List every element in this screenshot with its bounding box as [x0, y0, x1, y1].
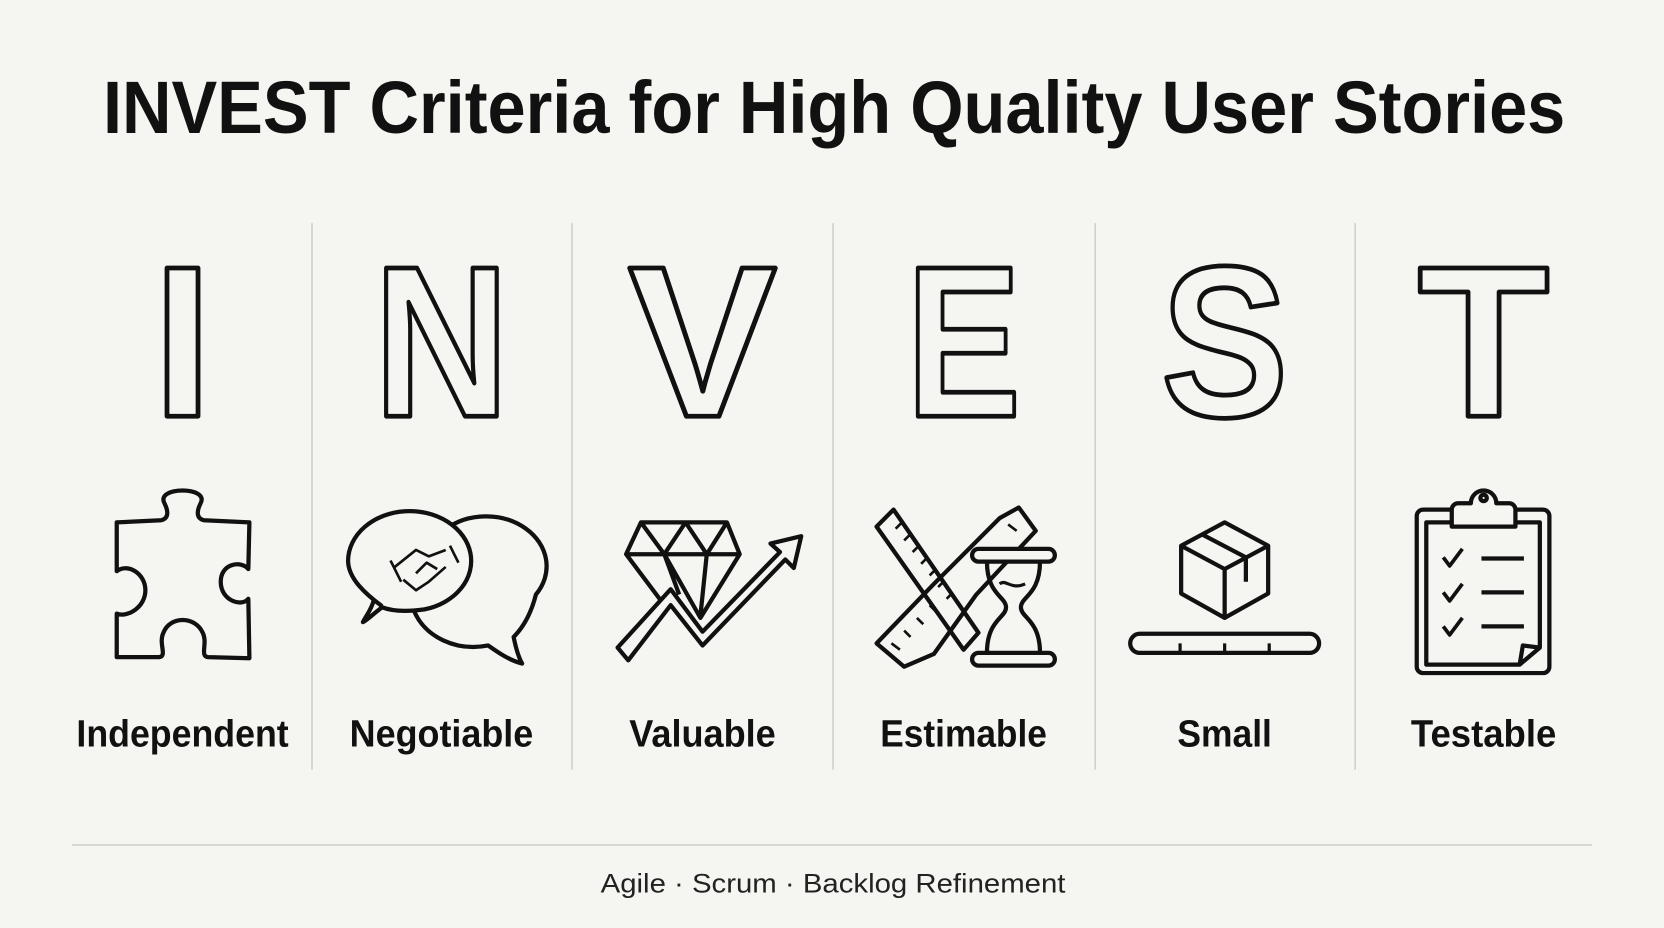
icon: rulers and hourglass	[877, 508, 1055, 667]
icon: clipboard checklist	[1417, 491, 1549, 673]
label: Valuable: Valuable	[629, 712, 776, 755]
handshake	[391, 546, 458, 590]
footer text: Agile · Scrum · Backlog Refinement	[601, 869, 1066, 899]
icon: puzzle piece	[117, 491, 249, 658]
letter V: V	[628, 221, 777, 462]
outlined letters INVEST	[153, 221, 1549, 462]
letter I: I	[153, 221, 212, 462]
icon: diamond with rising arrow	[618, 522, 801, 660]
label: Small: Small	[1177, 712, 1272, 755]
labels	[76, 712, 1556, 755]
letter N: N	[374, 221, 509, 462]
label: Independent: Independent	[76, 712, 289, 755]
icon: speech bubbles with handshake	[348, 500, 547, 664]
title: INVEST Criteria for High Quality User Stories	[103, 66, 1565, 149]
label: Testable: Testable	[1411, 712, 1556, 755]
label: Negotiable: Negotiable	[350, 712, 533, 755]
letter E: E	[906, 221, 1021, 462]
letter T: T	[1418, 221, 1549, 462]
icon: small box on ruler	[1130, 522, 1319, 653]
letter S: S	[1161, 221, 1288, 462]
label: Estimable: Estimable	[880, 712, 1047, 755]
